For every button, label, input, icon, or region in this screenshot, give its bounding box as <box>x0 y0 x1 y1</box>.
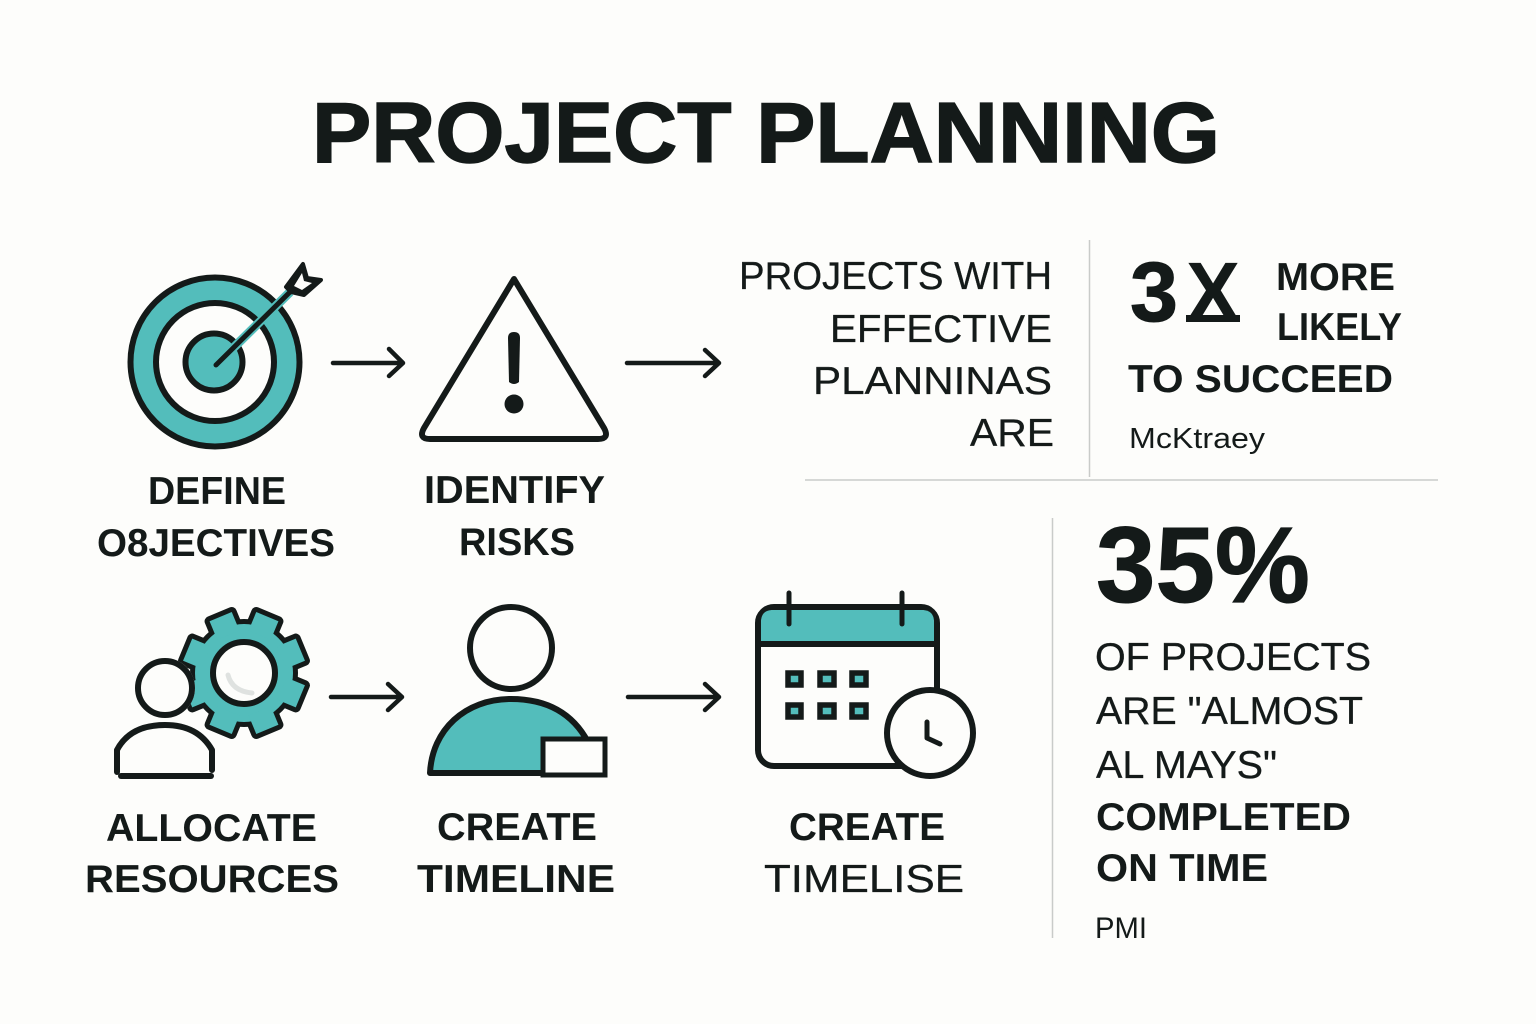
step label: identify risks: RISKS <box>459 521 575 564</box>
step label: create timelise: TIMELISE <box>764 858 964 901</box>
title: PROJECT PLANNING <box>312 86 1220 181</box>
statistic: 3x more likely to succeed <box>1128 245 1402 455</box>
icon: person with box <box>430 607 605 775</box>
icon: warning triangle <box>422 279 606 439</box>
step label: create timeline <box>417 806 615 901</box>
divider: vertical top <box>1088 240 1090 477</box>
statistic: 3x more likely to succeed: LIKELY <box>1277 306 1402 349</box>
step label: allocate resources <box>85 807 339 901</box>
statistic: 3x more likely to succeed: X <box>1186 245 1240 339</box>
statistic: 35% of projects: ARE "ALMOST <box>1096 690 1363 733</box>
step label: allocate resources: ALLOCATE <box>106 807 317 850</box>
text block: projects with effective planning: ARE <box>970 412 1054 455</box>
step label: create timeline: TIMELINE <box>417 858 615 901</box>
icon: target with arrow <box>130 264 321 446</box>
text block: projects with effective planning: PROJECTS WITH <box>739 255 1052 298</box>
step label: define objectives: DEFINE <box>148 470 286 513</box>
arrow: timeline to calendar <box>628 684 719 710</box>
arrow: risks to statistic <box>627 350 719 376</box>
text block: projects with effective planning: PLANNINAS <box>813 360 1052 403</box>
statistic: 35% of projects: ON TIME <box>1096 847 1268 890</box>
statistic: 35% of projects: COMPLETED <box>1096 796 1351 839</box>
step label: create timeline: CREATE <box>437 806 597 849</box>
arrow: resources to timeline <box>331 684 402 710</box>
statistic: 35% of projects <box>1095 504 1371 945</box>
step label: create timelise: CREATE <box>789 806 945 849</box>
step label: define objectives <box>97 470 335 565</box>
step label: define objectives: O8JECTIVES <box>97 522 335 565</box>
arrow: objectives to risks <box>333 349 403 376</box>
statistic: 35% of projects: OF PROJECTS <box>1095 636 1371 679</box>
step label: create timelise <box>764 806 964 901</box>
divider: horizontal <box>805 479 1438 481</box>
divider: vertical bottom <box>1052 518 1054 938</box>
statistic: 35% of projects: 35% <box>1096 504 1310 625</box>
step label: identify risks <box>424 469 605 564</box>
statistic: 3x more likely to succeed: TO SUCCEED <box>1128 358 1393 401</box>
statistic: 35% of projects: AL MAYS" <box>1096 744 1277 787</box>
step label: identify risks: IDENTIFY <box>424 469 605 512</box>
icon: calendar with clock <box>758 593 973 776</box>
text block: projects with effective planning <box>739 255 1054 455</box>
source: mckinsey: McKtraey <box>1129 423 1266 455</box>
icon: person with gear <box>117 612 305 776</box>
source: pmi: PMI <box>1095 912 1147 945</box>
text block: projects with effective planning: EFFECTIVE <box>830 308 1052 351</box>
statistic: 3x more likely to succeed: MORE <box>1276 256 1395 299</box>
statistic: 3x more likely to succeed: 3 <box>1130 245 1178 339</box>
step label: allocate resources: RESOURCES <box>85 858 339 901</box>
